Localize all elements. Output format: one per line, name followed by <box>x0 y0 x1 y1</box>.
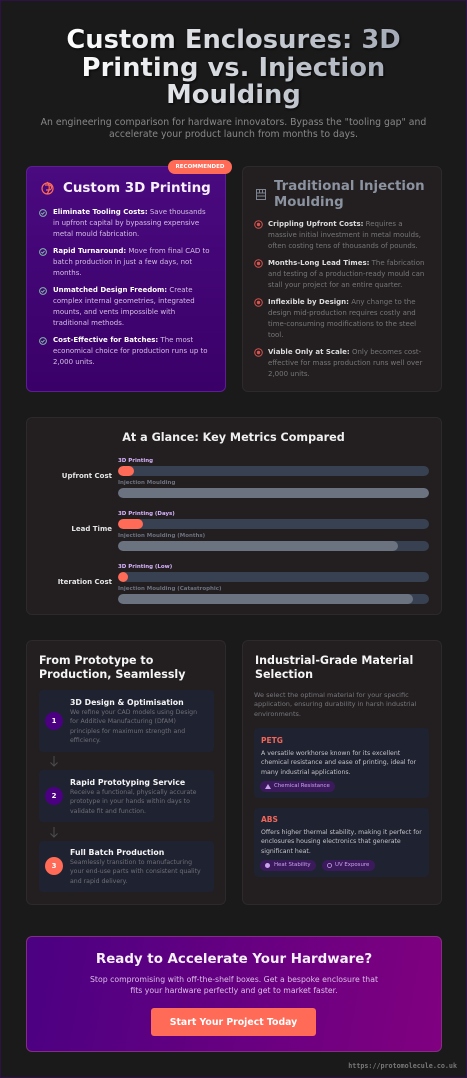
step 2: prototype in your hands within days to <box>70 798 190 805</box>
material: PETG <box>254 728 429 798</box>
list: injection moulding drawbacks: and testing of a production-ready mould can <box>268 270 424 278</box>
text: material intro <box>254 691 416 718</box>
step 1: principles for maximum strength and <box>70 728 185 735</box>
list: injection moulding drawbacks: Viable Only at Scale: Only becomes cost- <box>268 348 421 356</box>
list: injection moulding drawbacks <box>254 220 424 378</box>
bar chart: upfront cost: Injection Moulding <box>118 480 175 486</box>
badge: recommended: RECOMMENDED <box>176 164 224 170</box>
list: injection moulding drawbacks: often costing tens of thousands of pounds. <box>268 242 418 250</box>
text: call to action <box>90 975 378 995</box>
title: Moulding <box>166 80 301 110</box>
step 3: Full Batch Production <box>70 848 164 857</box>
heading: call to action: Ready to Accelerate Your Hardware? <box>96 952 372 967</box>
arrow <box>50 756 58 766</box>
bar chart: iteration cost: 3D Printing (Low) <box>118 564 172 570</box>
tag: UV exposure: UV Exposure <box>335 862 369 868</box>
material: PETG: PETG <box>261 736 283 745</box>
material: ABS: significant heat. <box>261 848 311 855</box>
title <box>66 25 401 110</box>
arrow <box>50 827 58 838</box>
step 2 <box>39 770 214 822</box>
heading: traditional injection moulding: Traditional Injection <box>274 179 425 194</box>
list: 3D printing benefits: months. <box>53 269 82 277</box>
step 1 <box>39 690 214 752</box>
button: start your project <box>151 1008 316 1036</box>
list: injection moulding drawbacks: stall your project for an entire quarter. <box>268 281 402 289</box>
material: PETG: many industrial applications. <box>261 769 351 776</box>
step 1: for Additive Manufacturing (DfAM) <box>70 718 176 725</box>
step 3: and rapid delivery. <box>70 878 127 885</box>
heading: prototype to production: Production, Seamlessly <box>39 668 185 681</box>
list: injection moulding drawbacks: Months-Long Lead Times: The fabrication <box>268 259 424 267</box>
panel: call to action <box>26 936 442 1052</box>
heading: material selection: Selection <box>255 668 313 681</box>
text: material intro: environments. <box>254 710 301 718</box>
list: 3D printing benefits: Cost-Effective for Batches: The most <box>53 336 193 344</box>
tag: chemical resistance: Chemical Resistance <box>274 783 330 789</box>
list: 3D printing benefits: in upfront capital by bypassing expensive <box>53 219 199 227</box>
step 1: 1 <box>52 717 56 725</box>
bar chart: lead time <box>71 511 429 551</box>
heading: material selection <box>255 654 413 681</box>
step 2: Receive a functional, physically accurate <box>70 789 196 796</box>
bar chart: iteration cost: Injection Moulding (Catastrophic) <box>118 586 222 592</box>
subtitle: accelerate your product launch from months to days. <box>109 129 358 140</box>
tag: heat stability <box>260 860 316 871</box>
list: injection moulding drawbacks: massive initial investment in metal moulds, <box>268 231 421 239</box>
material: ABS <box>254 808 429 877</box>
text: material intro: application, ensuring durability in harsh industrial <box>254 700 416 708</box>
list: 3D printing benefits: Eliminate Tooling Costs: Save thousands <box>53 208 206 216</box>
step 1: 3D Design & Optimisation <box>70 698 184 707</box>
list: injection moulding drawbacks: design mid-production requires costly and <box>268 309 416 317</box>
step 3: 3 <box>52 862 56 870</box>
tag: chemical resistance <box>260 781 335 792</box>
heading: traditional injection moulding <box>274 179 425 210</box>
icon: 3D printing <box>41 182 54 195</box>
bar chart: lead time: 3D Printing (Days) <box>118 511 175 517</box>
bar chart: upfront cost: Upfront Cost <box>62 472 112 480</box>
list: 3D printing benefits: 2,000 units. <box>53 358 95 366</box>
step 3: Seamlessly transition to manufacturing <box>70 859 192 866</box>
list: 3D printing benefits: economical choice for production runs up to <box>53 347 208 355</box>
button: start your project: Start Your Project Today <box>170 1017 297 1028</box>
heading: material selection: Industrial-Grade Material <box>255 654 413 667</box>
heading: prototype to production: From Prototype to <box>39 654 153 667</box>
bar chart: lead time: Injection Moulding (Months) <box>118 533 205 539</box>
panel: material selection <box>242 640 442 905</box>
text: call to action: Stop compromising with off-the-shelf boxes. Get a bespoke enclosure that <box>90 975 378 984</box>
list: injection moulding drawbacks: Inflexible by Design: Any change to the <box>268 298 416 306</box>
list: 3D printing benefits: traditional methods. <box>53 319 124 327</box>
bar chart: iteration cost: Iteration Cost <box>58 578 112 586</box>
step 2: validate fit and function. <box>70 808 146 815</box>
material: ABS: enclosures housing electronics that generate <box>261 838 401 845</box>
step 3: your end-use parts with consistent quality <box>70 868 201 875</box>
text: call to action: fits your hardware perfectly and get to market faster. <box>130 986 338 995</box>
title: Printing vs. Injection <box>82 52 385 82</box>
subtitle: An engineering comparison for hardware innovators. Bypass the "tooling gap" and <box>41 116 426 128</box>
tag: heat stability: Heat Stability <box>274 862 311 868</box>
heading: key metrics: At a Glance: Key Metrics Compared <box>122 431 345 444</box>
heading: traditional injection moulding: Moulding <box>274 194 344 210</box>
step 2: Rapid Prototyping Service <box>70 778 185 787</box>
title: Custom Enclosures: 3D <box>66 25 401 55</box>
list: 3D printing benefits: mounts, and vents impossible with <box>53 308 175 316</box>
list: injection moulding drawbacks: time-consuming modifications to the steel <box>268 320 416 328</box>
panel: key metrics <box>26 417 442 615</box>
material: ABS: ABS <box>261 815 278 824</box>
footer url: https://protomolecule.co.uk <box>348 1062 457 1070</box>
text: material intro: We select the optimal material for your specific <box>254 691 409 699</box>
tag: UV exposure <box>322 860 375 871</box>
panel: custom 3D printing <box>26 166 226 392</box>
panel: prototype to production <box>26 640 226 905</box>
bar chart: lead time: Lead Time <box>71 525 112 533</box>
list: injection moulding drawbacks: tool. <box>268 331 283 339</box>
list: injection moulding drawbacks: Crippling Upfront Costs: Requires a <box>268 220 403 228</box>
list: 3D printing benefits: batch production in just a few days, not <box>53 258 192 266</box>
list: 3D printing benefits: metal mould fabrication. <box>53 230 139 238</box>
step 1: efficiency. <box>70 737 101 744</box>
material: PETG: chemical resistance and ease of printing, ideal for <box>261 759 416 766</box>
badge: recommended <box>168 160 232 174</box>
icon: mould <box>256 189 266 200</box>
list: 3D printing benefits <box>39 208 210 366</box>
list: injection moulding drawbacks: effective for mass production runs well over <box>268 359 422 367</box>
bar chart: upfront cost: 3D Printing <box>118 458 153 464</box>
panel: traditional injection moulding <box>242 166 442 392</box>
heading: prototype to production <box>39 654 186 681</box>
bar chart: iteration cost <box>58 564 429 604</box>
heading: custom 3D printing: Custom 3D Printing <box>63 181 211 196</box>
list: 3D printing benefits: Unmatched Design Freedom: Create <box>53 286 193 294</box>
step 1: We refine your CAD models using Design <box>70 709 197 716</box>
subtitle <box>40 116 426 140</box>
material: PETG: A versatile workhorse known for its excellent <box>261 750 400 757</box>
bar chart: upfront cost <box>62 458 429 498</box>
list: 3D printing benefits: Rapid Turnaround: Move from final CAD to <box>53 247 210 255</box>
list: injection moulding drawbacks: 2,000 units. <box>268 370 310 378</box>
step 3 <box>39 841 214 892</box>
list: 3D printing benefits: complex internal geometries, integrated <box>53 297 195 305</box>
step 2: 2 <box>52 792 56 800</box>
material: ABS: Offers higher thermal stability, making it perfect for <box>261 829 422 836</box>
